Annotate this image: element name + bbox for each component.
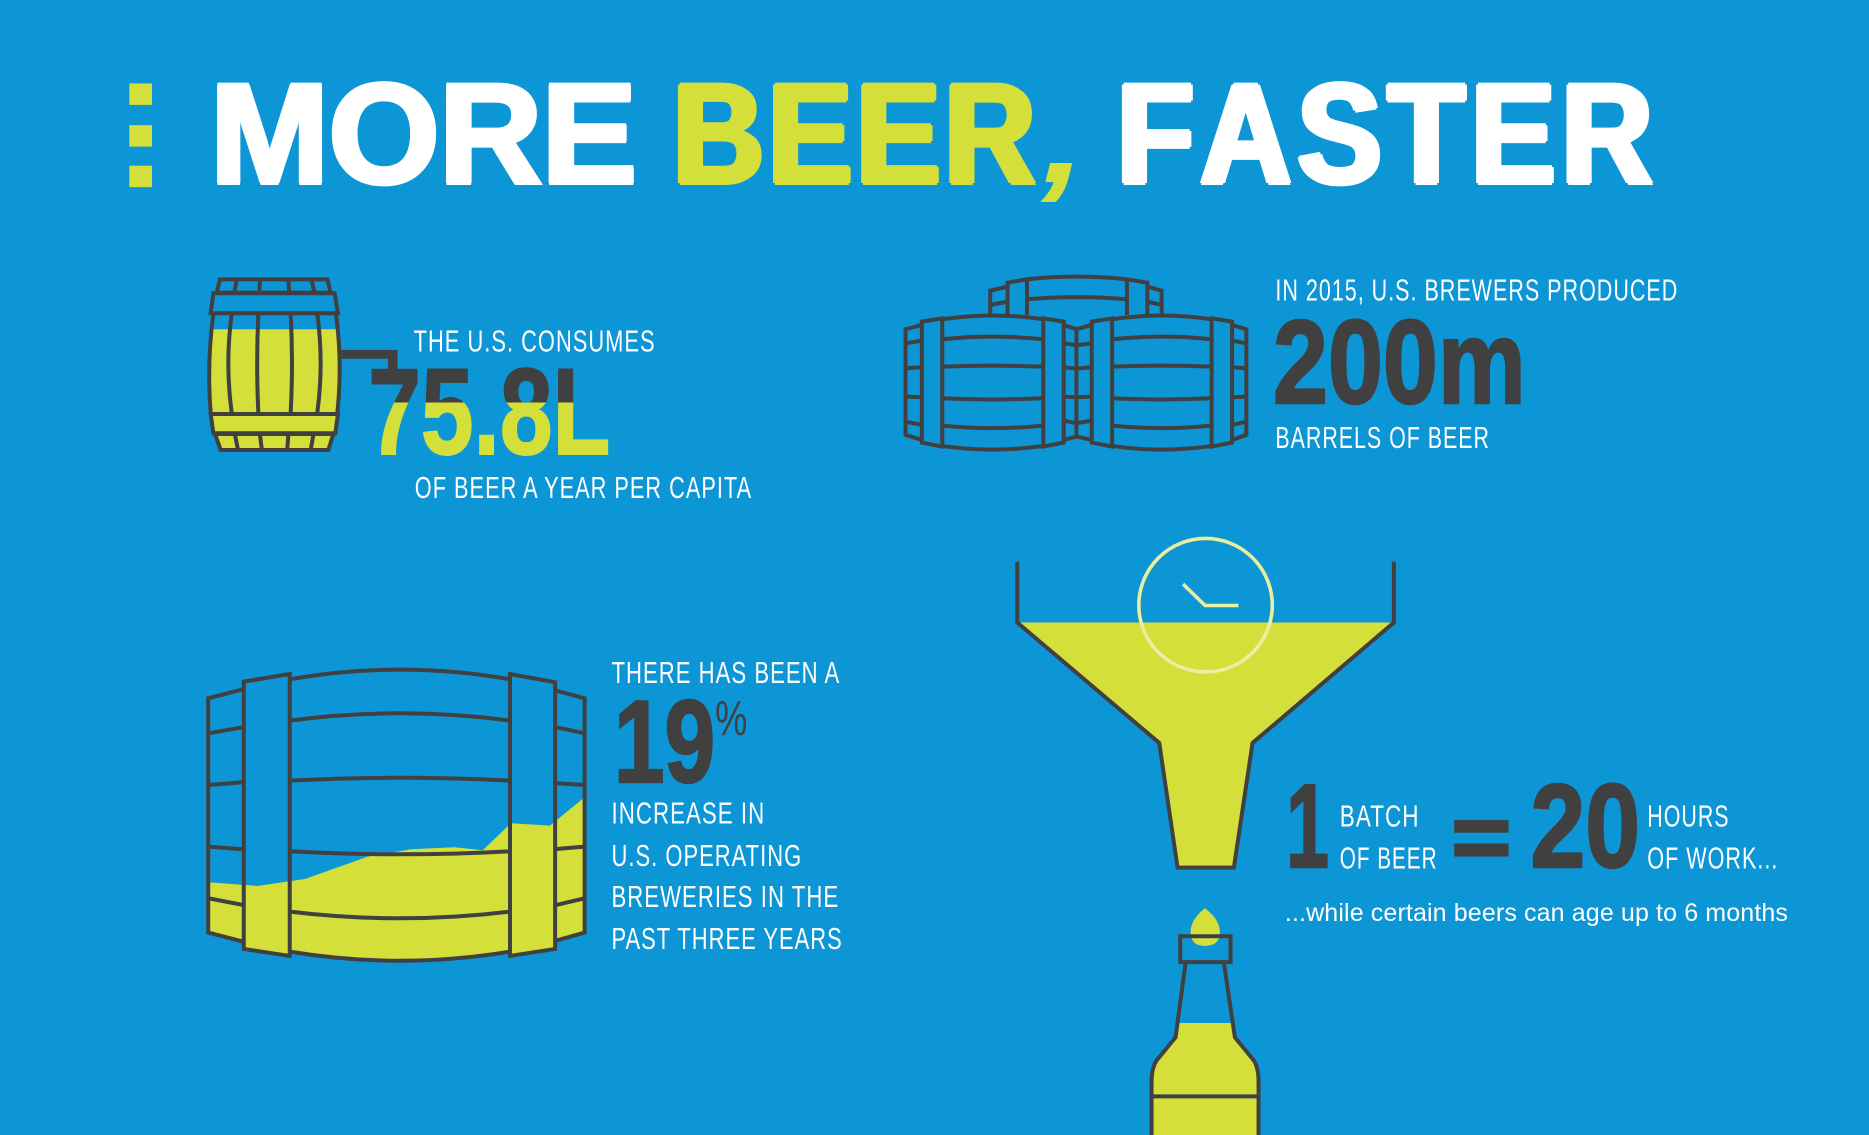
text: barrels of beer: BARRELS OF BEER bbox=[1275, 420, 1490, 455]
title bbox=[210, 55, 1658, 214]
icon: equals sign bbox=[1454, 820, 1509, 857]
text: aging note: ...while certain beers can age up to 6 months bbox=[1285, 899, 1788, 927]
icon: title marker squares bbox=[129, 83, 152, 187]
text: the U.S. consumes: THE U.S. CONSUMES bbox=[414, 324, 656, 359]
text: in 2015 U.S. brewers produced: IN 2015, U.S. BREWERS PRODUCED bbox=[1275, 272, 1678, 307]
text: batch of beer: BATCH bbox=[1340, 799, 1420, 834]
stat: 20: 20 bbox=[1530, 760, 1640, 893]
text: increase description: U.S. OPERATING bbox=[611, 838, 802, 873]
title word: MORE: MORE bbox=[210, 55, 636, 214]
chart: barrel with rising area fill bbox=[208, 670, 585, 961]
stat: 1: 1 bbox=[1286, 760, 1329, 893]
panel: barrels produced bbox=[906, 272, 1678, 455]
text: hours of work: OF WORK... bbox=[1647, 840, 1778, 875]
text: increase description: INCREASE IN bbox=[611, 796, 765, 831]
stat: 75.8L: 75.8L bbox=[368, 344, 610, 481]
title word: BEER: BEER bbox=[672, 55, 1039, 214]
text: batch of beer: OF BEER bbox=[1340, 840, 1438, 875]
text: of beer a year per capita: OF BEER A YEAR PER CAPITA bbox=[415, 470, 752, 505]
text: hours of work bbox=[1647, 799, 1778, 875]
text: hours of work: HOURS bbox=[1647, 799, 1730, 834]
icon: filled barrel with tap bbox=[209, 279, 398, 450]
text: increase description bbox=[611, 796, 843, 956]
icon: funnel with beer bbox=[1017, 562, 1394, 868]
title word: FASTER: FASTER bbox=[1116, 55, 1658, 214]
stat unit: percent: % bbox=[715, 692, 747, 746]
stat: 19: 19 bbox=[614, 676, 715, 807]
icon: beer bottle bbox=[1152, 936, 1259, 1135]
panel: brewing time bbox=[1017, 538, 1788, 1135]
text: increase description: PAST THREE YEARS bbox=[611, 921, 843, 956]
stat: 200m: 200m bbox=[1273, 296, 1526, 429]
text: batch of beer bbox=[1340, 799, 1438, 875]
icon: beer drop bbox=[1191, 908, 1220, 946]
icon: clock bbox=[1139, 538, 1272, 672]
panel: brewery growth bbox=[208, 655, 843, 961]
panel: consumption per capita bbox=[209, 279, 752, 505]
icon: stack of three barrels bbox=[906, 277, 1246, 450]
text: increase description: BREWERIES IN THE bbox=[611, 879, 839, 914]
title comma: , bbox=[1031, 67, 1103, 210]
text: there has been a: THERE HAS BEEN A bbox=[611, 655, 840, 690]
